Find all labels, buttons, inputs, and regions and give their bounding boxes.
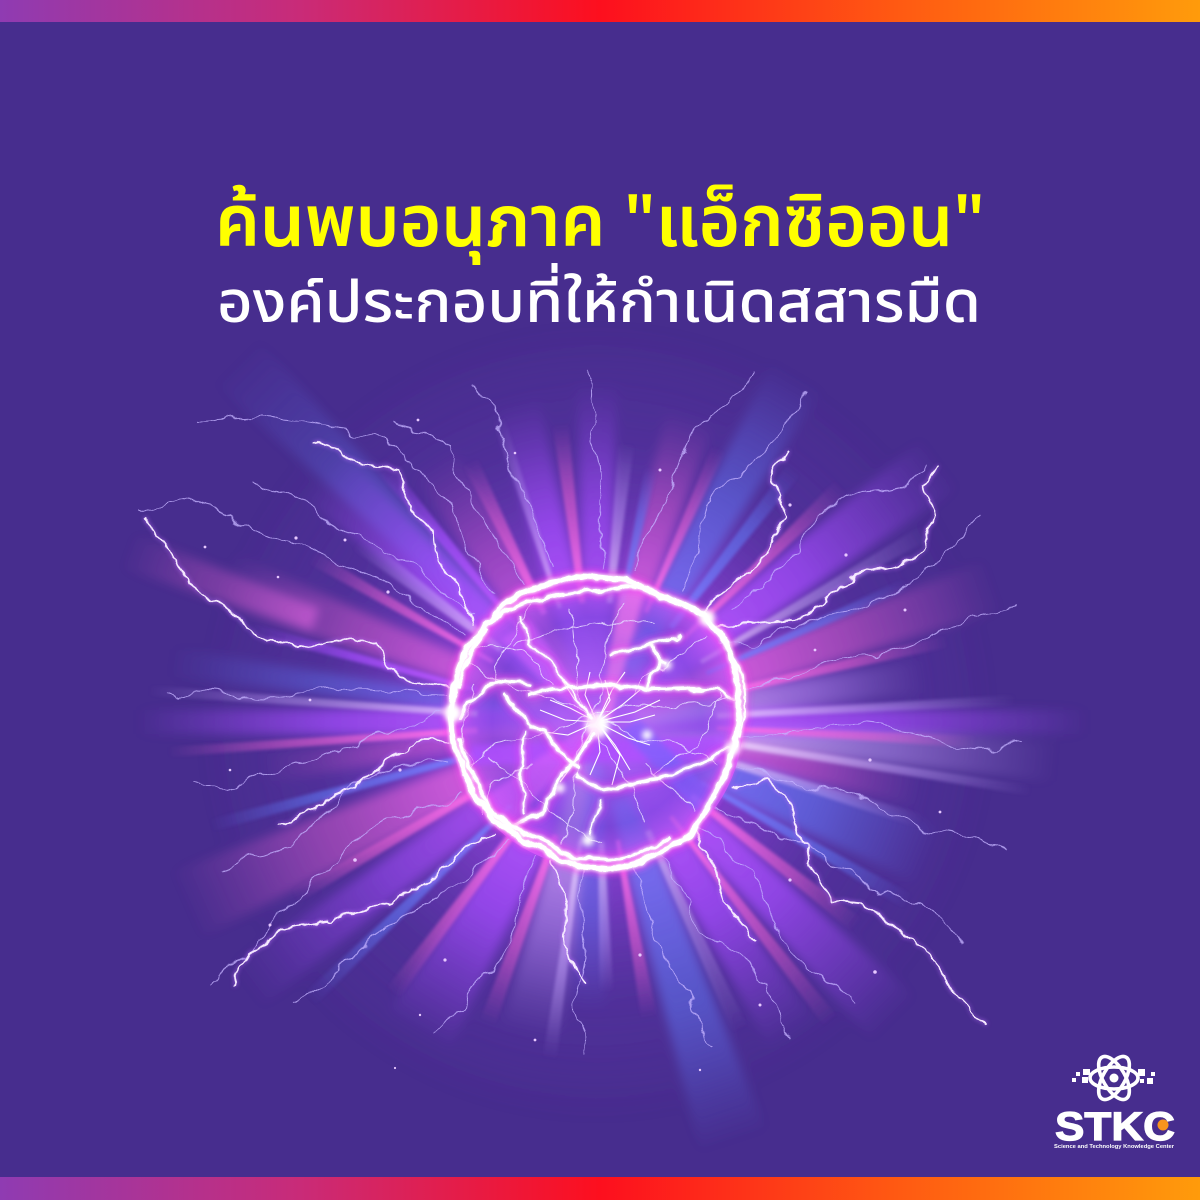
central bright core	[585, 712, 609, 738]
sphere interior glow	[451, 576, 743, 868]
title line 2: องค์ประกอบที่ให้กำเนิดสสารมืด	[217, 261, 981, 349]
central burst	[540, 672, 660, 785]
bright outer lightning bolts	[150, 444, 990, 1032]
title line 1: ค้นพบอนุภาค "แอ็กซิออน"	[215, 171, 985, 279]
logo wordmark: STKC	[1055, 1105, 1175, 1149]
logo atom icon	[1090, 1052, 1138, 1104]
inner cracks	[463, 620, 737, 837]
logo pixel dots	[1072, 1069, 1155, 1084]
top gradient bar	[0, 0, 1200, 22]
sphere thin inner filaments	[468, 600, 730, 850]
fine sharp streaks	[148, 416, 1032, 1060]
sphere outer ring	[453, 578, 748, 872]
title	[215, 171, 985, 349]
sparkle particles	[204, 419, 941, 1071]
logo tagline: Science and Technology Knowledge Center	[1054, 1144, 1175, 1150]
hot spots	[444, 610, 740, 846]
illustration: plasma energy burst	[121, 322, 1087, 1151]
sphere interior pink streaks	[470, 590, 725, 825]
light beams	[121, 322, 1087, 1151]
logo: STKC	[1054, 1052, 1175, 1150]
logo orange dot	[1158, 1120, 1168, 1130]
bottom gradient bar	[0, 1177, 1200, 1200]
thin outer filaments	[140, 380, 1030, 1060]
